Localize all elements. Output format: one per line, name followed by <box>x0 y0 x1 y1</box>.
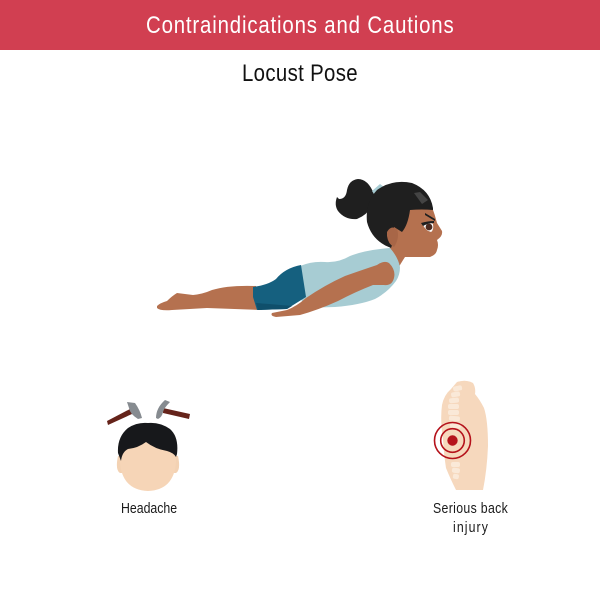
label: headache: Headache <box>121 500 177 516</box>
injury target rings <box>434 422 470 458</box>
icon: headache <box>107 400 190 491</box>
spine <box>448 385 463 480</box>
hair <box>367 182 433 248</box>
icon: back injury <box>434 381 488 490</box>
left hammer <box>107 402 142 425</box>
neck and face <box>390 205 442 272</box>
header banner <box>0 0 600 50</box>
shorts <box>253 265 306 310</box>
subtitle: Locust Pose <box>242 59 358 86</box>
injury target centre <box>447 435 458 446</box>
arm and hand <box>272 262 394 317</box>
ears <box>117 456 179 473</box>
face <box>120 440 176 491</box>
illustration: girl in locust pose <box>157 179 442 317</box>
label: serious back injury: Serious back <box>433 500 508 516</box>
title: Contraindications and Cautions <box>146 11 454 38</box>
label: serious back injury: injury <box>453 519 488 535</box>
eye <box>421 221 434 232</box>
hair tie <box>372 184 384 197</box>
right hammer <box>156 400 190 419</box>
ponytail <box>336 179 374 219</box>
ear <box>387 228 398 247</box>
shorts shadow <box>256 303 292 310</box>
hair <box>118 423 177 461</box>
shirt <box>300 248 400 308</box>
label: serious back injury <box>433 500 508 535</box>
eyebrow <box>425 213 435 221</box>
hair highlight <box>414 192 428 204</box>
torso <box>441 381 488 490</box>
leg and foot <box>157 286 262 310</box>
